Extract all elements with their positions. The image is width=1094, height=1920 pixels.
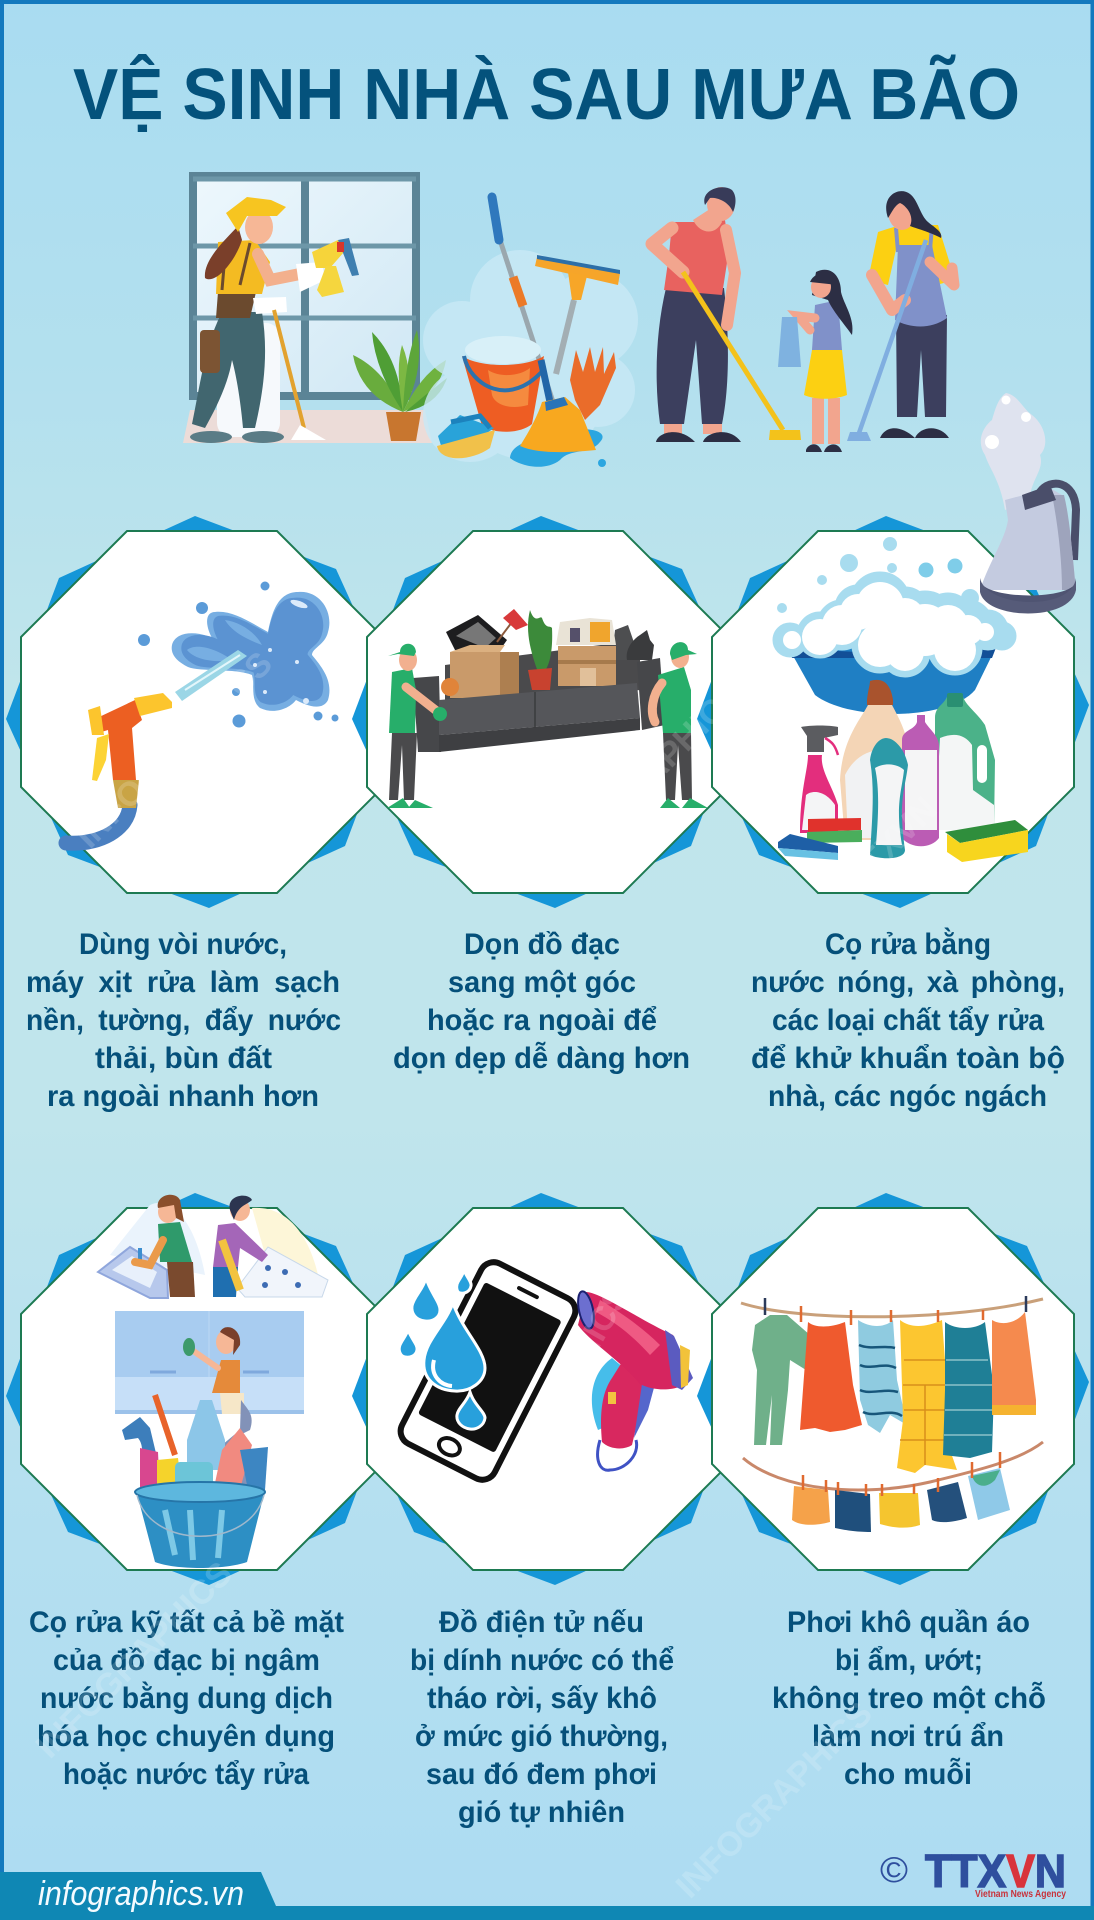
- icon: spray gun and hose: [66, 693, 172, 843]
- hero illustration: woman cleaning window: [183, 172, 432, 443]
- icon: wet phone: [396, 1257, 580, 1485]
- caption: panel 6: [772, 1606, 1046, 1791]
- icon: detergent bottles: [800, 680, 995, 858]
- caption: panel 4: nước bằng dung dịch: [40, 1681, 333, 1715]
- caption: panel 4: của đồ đạc bị ngâm: [53, 1644, 320, 1677]
- caption: panel 5: Đồ điện tử nếu: [439, 1606, 644, 1639]
- footer bar with site name: [0, 1872, 1094, 1920]
- icon: women washing sink and stove: [98, 1195, 328, 1298]
- watermark: INFOGRAPHICS: [69, 644, 280, 856]
- watermark: INFOGRAPHICS: [474, 1279, 637, 1524]
- panel 2 frame: moving furniture: [352, 516, 744, 908]
- copyright and agency logo: ©: [880, 1849, 908, 1890]
- watermark: [29, 644, 944, 1906]
- panel 3 frame: cleaning products: [697, 516, 1089, 908]
- icon: water splash: [138, 582, 338, 728]
- icon: bucket with cleaning products: [122, 1395, 268, 1568]
- caption: panel 5: bị dính nước có thể: [410, 1644, 674, 1677]
- icon: hair dryer: [575, 1290, 693, 1470]
- panel 4 frame: household surfaces: [6, 1193, 398, 1585]
- caption: panel 5: ở mức gió thường,: [415, 1720, 668, 1753]
- panel 5 frame: electronics and hair dryer: [352, 1193, 744, 1585]
- caption: panel 1: Dùng vòi nước,: [79, 928, 287, 961]
- copyright and agency logo: TTXVN: [925, 1845, 1066, 1897]
- caption: panel 6: Phơi khô quần áo: [787, 1606, 1030, 1639]
- caption: panel 2: Dọn đồ đạc: [464, 928, 620, 961]
- hero illustration: cleaning tools: [423, 197, 638, 467]
- caption: panel 1: máy xịt rửa làm sạch: [26, 966, 340, 999]
- panel 6 frame: laundry: [697, 1193, 1089, 1585]
- caption: panel 3: các loại chất tẩy rửa: [772, 1004, 1044, 1037]
- icon: sofa with boxes: [413, 609, 665, 752]
- caption: panel 5: [410, 1606, 674, 1829]
- icon: clothesline with large clothes: [741, 1296, 1043, 1473]
- caption: panel 6: cho muỗi: [844, 1757, 972, 1791]
- caption: panel 2: dọn dẹp dễ dàng hơn: [393, 1041, 690, 1075]
- watermark: INFOGRAPHICS: [29, 1554, 240, 1766]
- caption: panel 2: hoặc ra ngoài để: [427, 1004, 657, 1037]
- caption: panel 5: gió tự nhiên: [458, 1796, 625, 1829]
- icon: clothesline with small clothes: [743, 1442, 1043, 1532]
- footer bar with site name: infographics.vn: [38, 1875, 244, 1913]
- hero illustration: girl with cloth: [778, 270, 853, 452]
- caption: panel 3: Cọ rửa bằng: [825, 927, 991, 961]
- icon: mover left: [387, 644, 447, 808]
- hero illustration: man mopping: [652, 187, 801, 442]
- copyright and agency logo: Vietnam News Agency: [975, 1889, 1066, 1900]
- hero illustration: potted plant: [353, 330, 447, 441]
- icon: sponges: [778, 818, 1028, 862]
- caption: panel 6: bị ẩm, ướt;: [835, 1644, 983, 1677]
- caption: panel 1: thải, bùn đất: [95, 1042, 272, 1075]
- caption: panel 3: để khử khuẩn toàn bộ: [751, 1042, 1065, 1075]
- caption: panel 4: [29, 1606, 344, 1791]
- caption: panel 1: [26, 928, 341, 1113]
- hero illustration: woman with mop: [847, 191, 955, 441]
- caption: panel 5: sau đó đem phơi: [426, 1758, 657, 1791]
- caption: panel 1: nền, tường, đẩy nước: [26, 1004, 341, 1037]
- icon: mover right: [652, 642, 708, 808]
- icon: basin with foam: [776, 575, 1013, 714]
- caption: panel 4: hoặc nước tẩy rửa: [63, 1758, 309, 1791]
- watermark: TTXVN: [839, 790, 944, 896]
- caption: panel 3: nước nóng, xà phòng,: [751, 966, 1065, 999]
- caption: panel 6: không treo một chỗ: [772, 1681, 1046, 1715]
- watermark: INFOGRAPHICS: [539, 674, 750, 886]
- icon: bubbles: [777, 537, 979, 613]
- kettle with steam: [980, 393, 1076, 614]
- caption: panel 4: hóa học chuyên dụng: [37, 1720, 335, 1753]
- caption: panel 3: nhà, các ngóc ngách: [768, 1080, 1047, 1113]
- caption: panel 1: ra ngoài nhanh hơn: [47, 1080, 319, 1113]
- caption: panel 3: [751, 927, 1065, 1113]
- caption: panel 5: tháo rời, sấy khô: [427, 1682, 657, 1715]
- panel 1 frame: water hose: [6, 516, 398, 908]
- caption: panel 2: [393, 928, 690, 1075]
- icon: kitchen cabinet cleaning: [115, 1311, 304, 1414]
- caption: panel 6: làm nơi trú ẩn: [812, 1720, 1004, 1753]
- caption: panel 2: sang một góc: [448, 966, 636, 999]
- watermark: INFOGRAPHICS: [669, 1694, 880, 1906]
- caption: panel 4: Cọ rửa kỹ tất cả bề mặt: [29, 1606, 344, 1639]
- title: VỆ SINH NHÀ SAU MƯA BÃO: [73, 54, 1020, 135]
